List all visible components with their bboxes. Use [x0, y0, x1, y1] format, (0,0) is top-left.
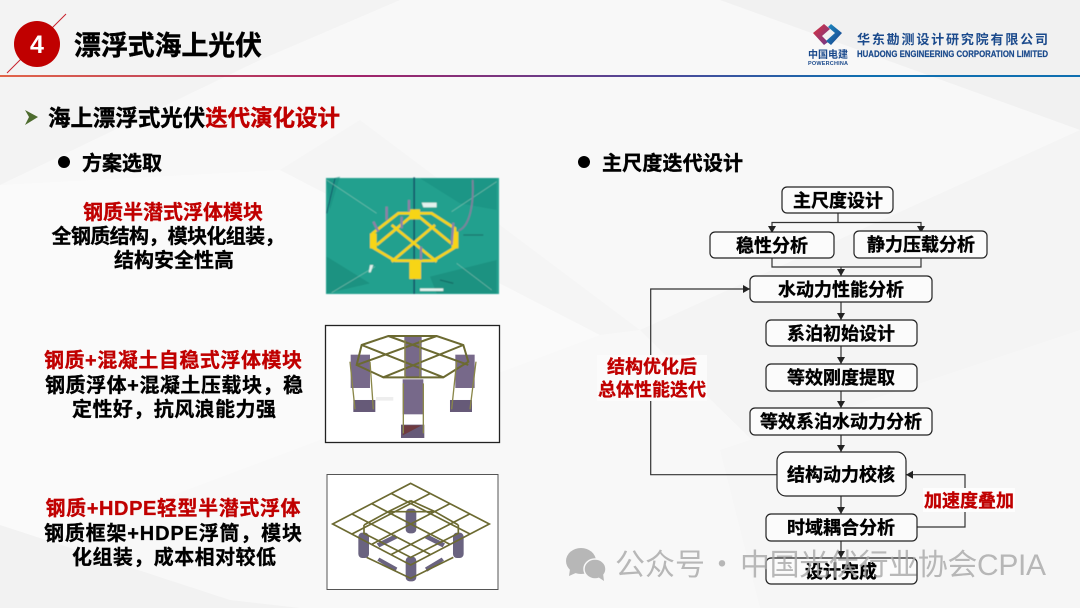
box: design complete: 设计完成	[805, 561, 877, 582]
box: hydrodynamic analysis	[750, 276, 932, 302]
text block: steel semi-submersible: 全钢质结构，模块化组装，	[52, 224, 284, 248]
panel: scheme selection	[44, 151, 500, 590]
text block: steel plus concrete	[44, 349, 303, 421]
image: steel float model in basin	[326, 177, 499, 294]
section number badge	[7, 14, 66, 73]
logo: PowerChina and Huadong: POWERCHINA	[808, 61, 848, 67]
box: initial mooring design: 系泊初始设计	[787, 323, 895, 344]
box: time domain coupling: 时域耦合分析	[787, 517, 895, 538]
logo: PowerChina and Huadong: 华东勘测设计研究院有限公司	[857, 32, 1048, 47]
box: equivalent mooring hydrodynamics: 等效系泊水动力分析	[760, 411, 922, 432]
text block: steel plus HDPE	[44, 497, 302, 569]
flowchart	[597, 187, 1015, 584]
box: initial mooring design	[766, 320, 917, 346]
box: equivalent stiffness	[766, 364, 917, 391]
text block: steel plus concrete: 定性好，抗风浪能力强	[72, 397, 276, 421]
label: structural optimisation loop: 总体性能迭代	[598, 380, 706, 400]
watermark: 公众号	[615, 549, 705, 582]
title: 漂浮式海上光伏	[74, 31, 262, 61]
label: acceleration superposition: 加速度叠加	[924, 491, 1014, 511]
subheading: 海上漂浮式光伏迭代演化设计	[48, 106, 340, 131]
box: time domain coupling	[766, 514, 917, 541]
icon: arrow bullet	[25, 110, 38, 125]
box: equivalent mooring hydrodynamics	[750, 408, 932, 435]
label: structural optimisation loop: 结构优化后	[607, 356, 697, 377]
icon: WeChat	[566, 548, 606, 581]
label: structural optimisation loop	[597, 355, 707, 401]
text block: steel plus HDPE: 化组装，成本相对较低	[72, 545, 276, 569]
section number badge: 4	[30, 31, 44, 59]
box: static ballast analysis	[854, 231, 987, 258]
image: steel and HDPE float model	[327, 474, 498, 590]
box: hydrodynamic analysis: 水动力性能分析	[778, 280, 904, 300]
box: structural dynamics check	[777, 452, 906, 496]
text block: steel plus concrete: 钢质+混凝土自稳式浮体模块	[44, 349, 302, 372]
logo: PowerChina and Huadong: HUADONG ENGINEERING CORPORATION LIMITED	[857, 49, 1048, 59]
watermark	[566, 540, 1046, 584]
text block: steel plus concrete: 钢质浮体+混凝土压载块，稳	[45, 374, 303, 397]
box: static ballast analysis: 静力压载分析	[867, 235, 975, 255]
text block: steel plus HDPE: 钢质+HDPE轻型半潜式浮体	[46, 497, 300, 520]
box: stability analysis: 稳性分析	[736, 235, 808, 256]
arrowheads	[743, 226, 925, 558]
icon: PowerChina diamond	[813, 24, 842, 45]
watermark: ·	[707, 540, 737, 584]
text block: steel semi-submersible: 结构安全性高	[114, 248, 234, 272]
heading: main dimension design: 主尺度迭代设计	[602, 152, 743, 175]
image: steel and concrete float model	[326, 326, 500, 442]
text block: steel plus HDPE: 钢质框架+HDPE浮筒，模块	[44, 521, 302, 545]
box: structural dynamics check: 结构动力校核	[787, 464, 895, 485]
box: main dimension design: 主尺度设计	[793, 191, 883, 211]
watermark: 中国光伏行业协会CPIA	[740, 549, 1046, 582]
box: stability analysis	[710, 232, 834, 258]
header rule	[0, 75, 1080, 77]
logo: PowerChina and Huadong	[808, 24, 1048, 67]
box: equivalent stiffness: 等效刚度提取	[787, 367, 895, 388]
box: main dimension design	[782, 187, 893, 213]
panel: main dimension iterative design	[578, 152, 1015, 584]
heading: scheme selection: 方案选取	[82, 151, 162, 175]
text block: steel semi-submersible	[52, 201, 284, 272]
logo: PowerChina and Huadong: 中国电建	[808, 48, 848, 61]
box: design complete	[766, 558, 917, 584]
text block: steel semi-submersible: 钢质半潜式浮体模块	[83, 201, 263, 224]
connector lines	[651, 213, 965, 558]
